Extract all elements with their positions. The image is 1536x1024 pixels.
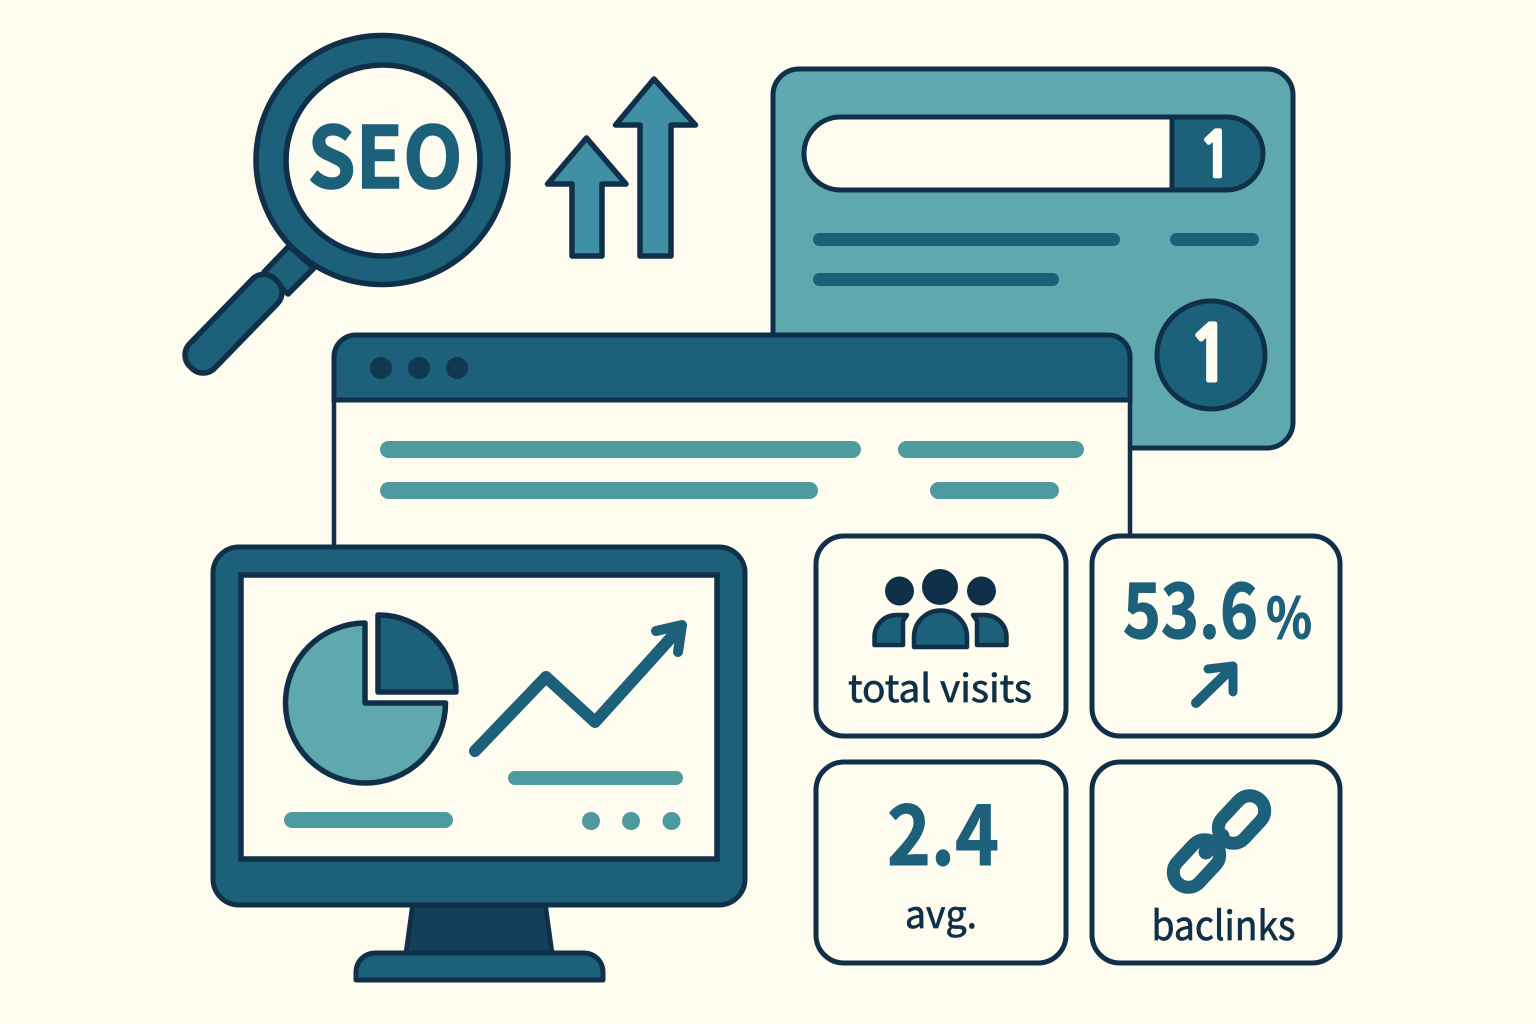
panel: browser window [334, 335, 1130, 560]
SEO label: SEO [308, 90, 462, 213]
search rank number: 1 [1197, 126, 1235, 187]
result lines [813, 233, 1259, 286]
icon: rising arrows [548, 79, 696, 256]
panel: total visits [816, 536, 1066, 736]
content lines [380, 441, 1084, 499]
icon: desktop monitor with analytics [213, 547, 745, 980]
monitor stand [356, 903, 603, 980]
label: total visits: total visits [848, 658, 1032, 713]
legend bars [284, 771, 683, 828]
panel: backlinks stat [1092, 762, 1340, 963]
monitor frame [213, 547, 745, 905]
panel: average stat [816, 762, 1066, 963]
pie chart [286, 615, 456, 783]
trend line with arrow [475, 625, 682, 751]
icon: up-right arrow [1196, 666, 1233, 703]
label: baclinks: baclinks [1152, 894, 1296, 952]
monitor screen [241, 575, 717, 859]
panel: percentage stat [1092, 536, 1340, 736]
panel: percentage stat: % [1266, 574, 1312, 655]
window control dots [370, 357, 468, 379]
icon: people [874, 569, 1007, 647]
icon: chain link [1167, 790, 1271, 893]
panel: search results card [773, 69, 1293, 448]
search bar [804, 117, 1263, 190]
legend dots [582, 812, 680, 830]
value: 2.4: 2.4 [887, 769, 999, 890]
rank badge [1157, 301, 1265, 409]
icon: SEO magnifying glass [178, 36, 508, 380]
browser title bar [334, 335, 1130, 400]
rank badge: 1 [1187, 318, 1233, 393]
label: avg.: avg. [905, 884, 977, 939]
value: 53.6%: 53.6 [1123, 550, 1258, 660]
